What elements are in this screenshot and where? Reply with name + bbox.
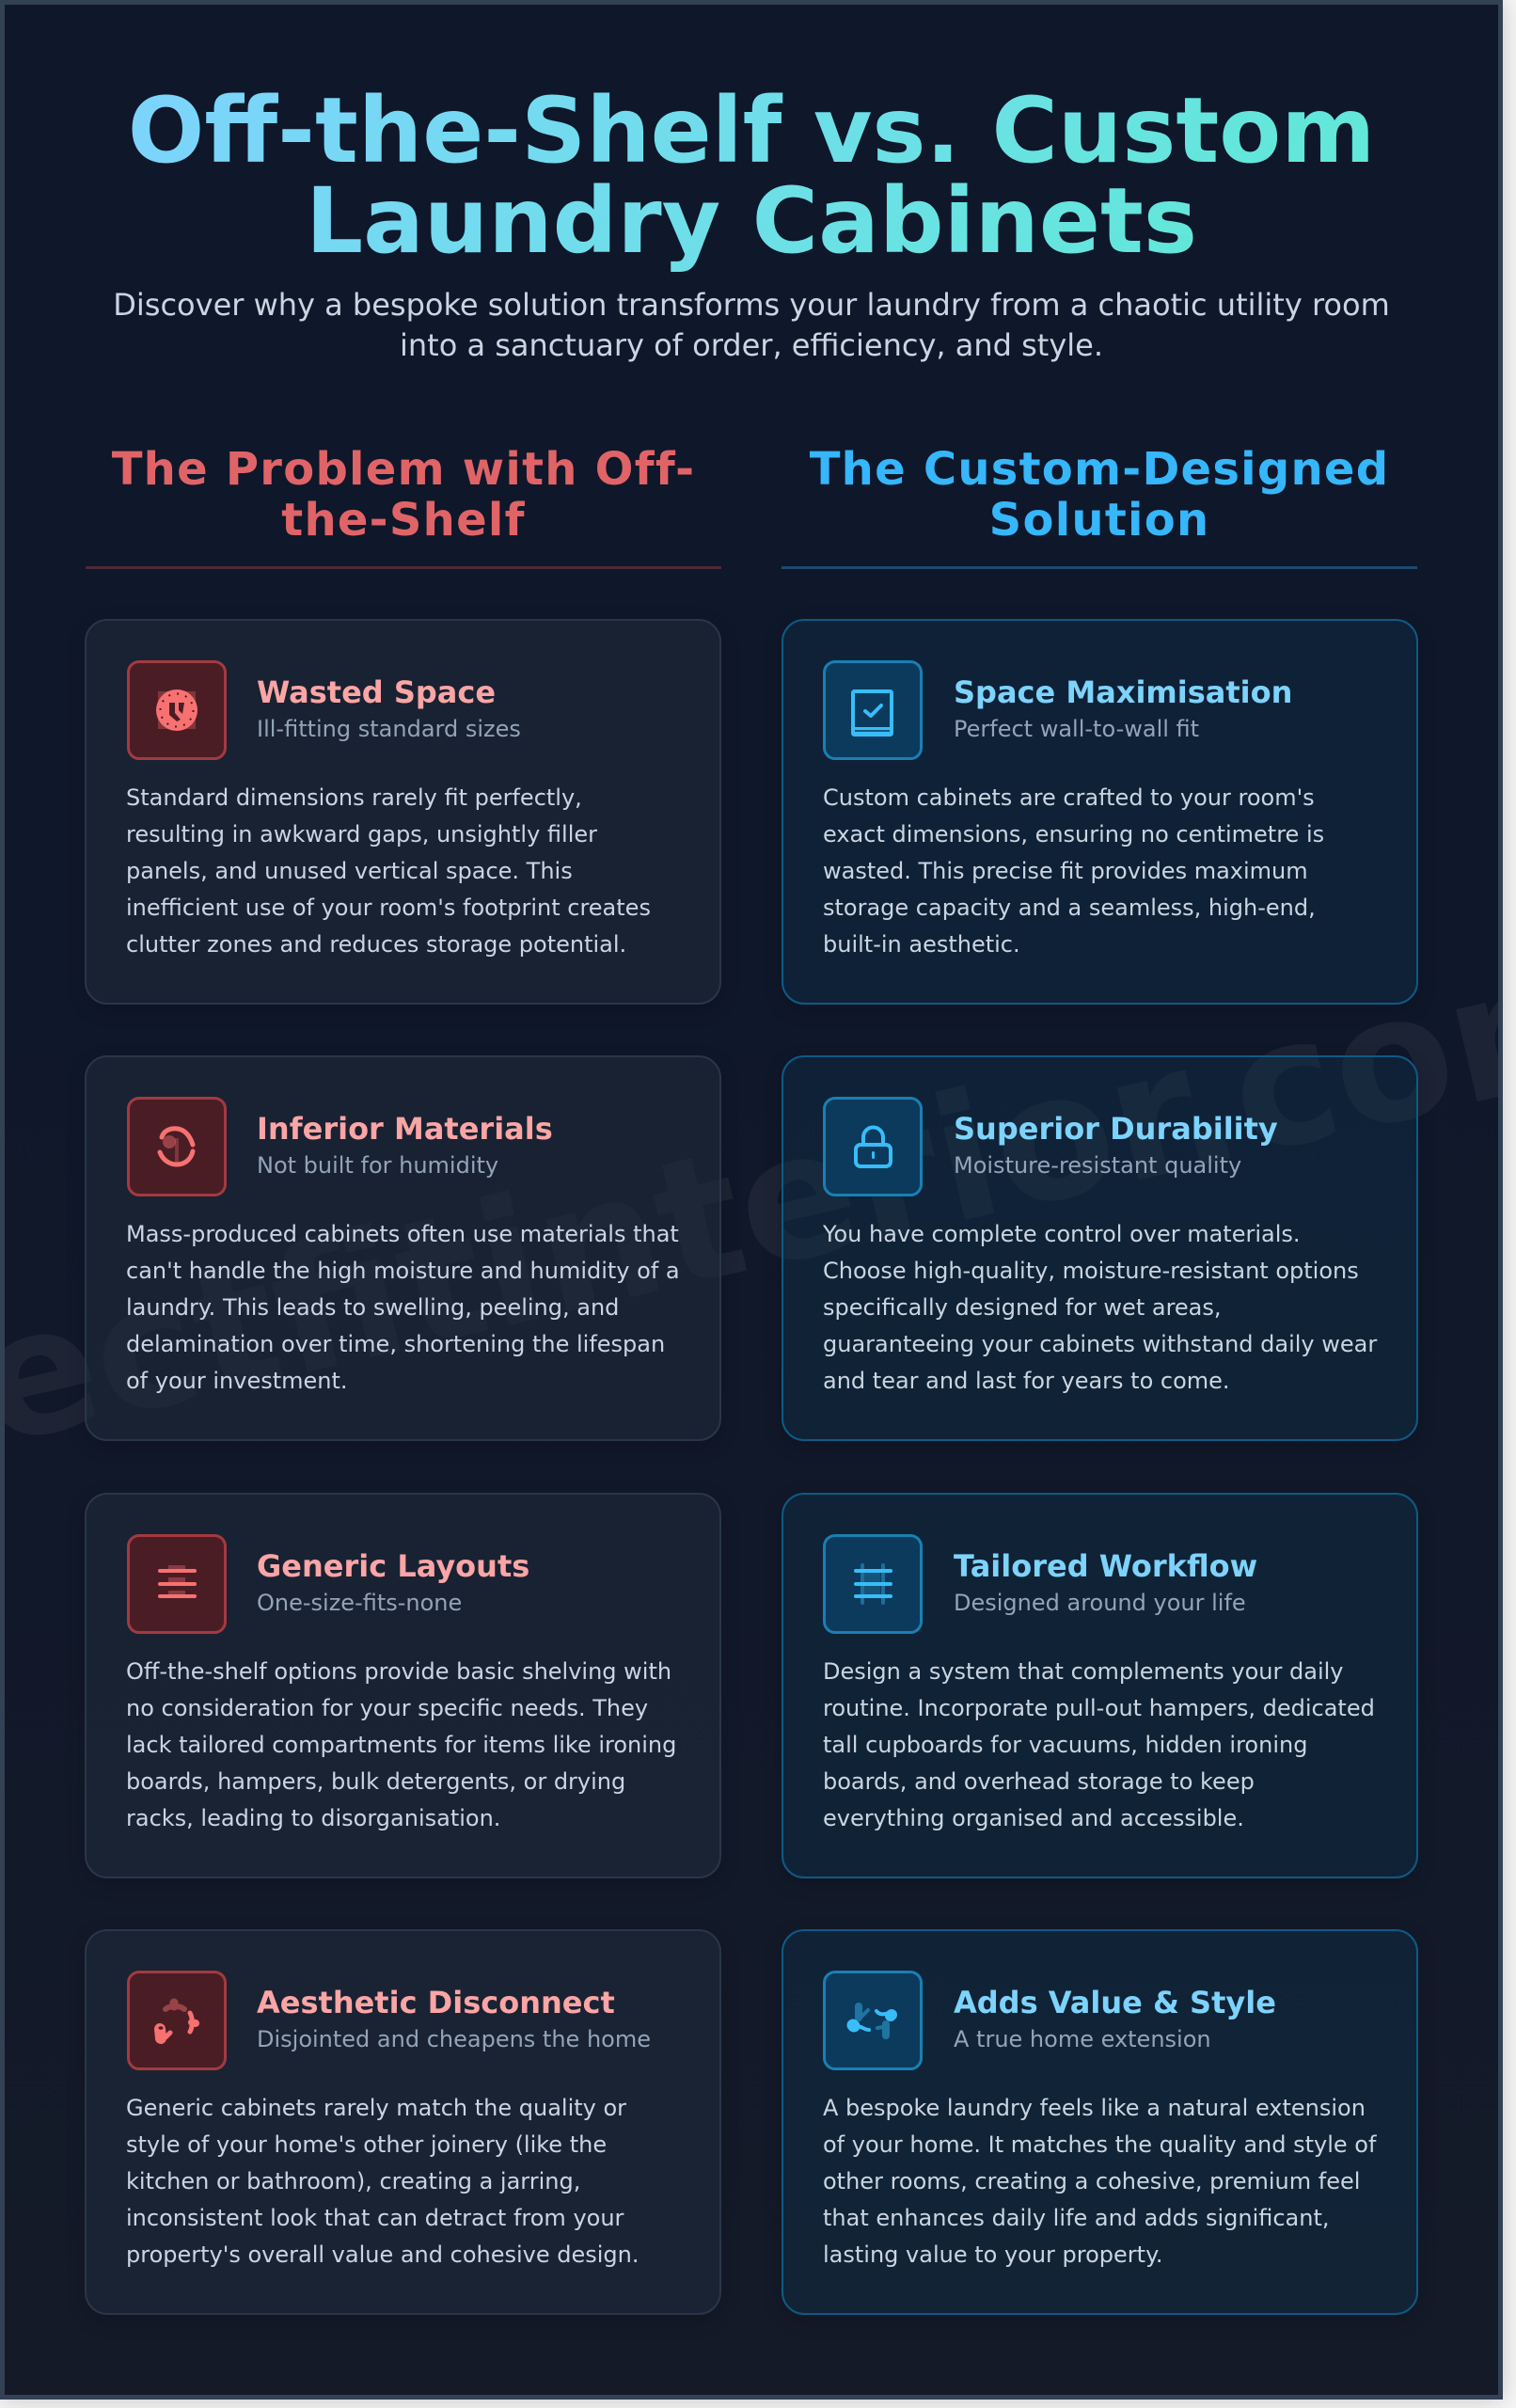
card body: Design a system that complements your daily xyxy=(823,1657,1343,1684)
card body xyxy=(823,1221,1377,1394)
icon: generic layouts xyxy=(127,1534,227,1634)
card body xyxy=(126,1657,676,1830)
title xyxy=(94,86,1409,289)
card body xyxy=(126,2094,640,2267)
card title: Adds Value & Style xyxy=(954,1985,1276,2020)
card body xyxy=(823,2094,1377,2267)
card subtitle: Moisture-resistant quality xyxy=(954,1152,1241,1179)
card subtitle: A true home extension xyxy=(954,2026,1211,2052)
card body: laundry. This leads to swelling, peeling, and xyxy=(126,1294,619,1321)
card body: tall cupboards for vacuums, hidden ironing xyxy=(823,1731,1307,1757)
title: Laundry Cabinets xyxy=(306,168,1197,274)
heading: solution column: Solution xyxy=(989,493,1209,546)
panel: aesthetic disconnect xyxy=(85,1929,721,2315)
panel: generic layouts xyxy=(85,1493,721,1878)
card body: other rooms, creating a cohesive, premium feel xyxy=(823,2167,1360,2194)
panel: inferior materials xyxy=(85,1055,721,1441)
card title: Superior Durability xyxy=(954,1111,1278,1147)
card body: no consideration for your specific needs. They xyxy=(126,1695,648,1721)
card body: wasted. This precise fit provides maximum xyxy=(823,858,1308,884)
card body: everything organised and accessible. xyxy=(823,1804,1244,1830)
card body: Choose high-quality, moisture-resistant options xyxy=(823,1257,1359,1283)
card body: resulting in awkward gaps, unsightly filler xyxy=(126,820,597,847)
card body: Custom cabinets are crafted to your room's xyxy=(823,784,1315,811)
panel: tailored workflow xyxy=(782,1493,1418,1878)
card body: and tear and last for years to come. xyxy=(823,1368,1230,1394)
card body: Standard dimensions rarely fit perfectly, xyxy=(126,784,582,811)
icon: space maximisation xyxy=(823,660,923,760)
card body xyxy=(823,784,1324,958)
card subtitle: Ill-fitting standard sizes xyxy=(257,716,521,742)
panel: adds value and style xyxy=(782,1929,1418,2315)
icon: wasted space xyxy=(127,660,227,760)
card body: inconsistent look that can detract from your xyxy=(126,2205,624,2231)
card body: specifically designed for wet areas, xyxy=(823,1294,1222,1321)
card body: lasting value to your property. xyxy=(823,2241,1162,2267)
card body: clutter zones and reduces storage potential. xyxy=(126,931,626,958)
card body: Mass-produced cabinets often use materials that xyxy=(126,1221,679,1247)
card body: of your home. It matches the quality and style of xyxy=(823,2131,1376,2158)
icon: inferior materials xyxy=(127,1097,227,1196)
card subtitle: Disjointed and cheapens the home xyxy=(257,2026,651,2052)
card body: storage capacity and a seamless, high-end, xyxy=(823,894,1316,920)
title: Off-the-Shelf vs. Custom xyxy=(128,78,1375,183)
panel: space maximisation xyxy=(782,619,1418,1005)
panel: wasted space xyxy=(85,619,721,1005)
card title: Wasted Space xyxy=(257,674,496,710)
card title: Generic Layouts xyxy=(257,1548,529,1584)
card title: Inferior Materials xyxy=(257,1111,553,1147)
card body xyxy=(126,784,651,958)
card body: delamination over time, shortening the lifespan xyxy=(126,1330,665,1356)
card body: boards, and overhead storage to keep xyxy=(823,1768,1255,1795)
icon: lock xyxy=(823,1097,923,1196)
heading: problem column: the-Shelf xyxy=(281,493,526,546)
card subtitle: Not built for humidity xyxy=(257,1152,498,1179)
card body: routine. Incorporate pull-out hampers, dedicated xyxy=(823,1695,1375,1721)
card body: racks, leading to disorganisation. xyxy=(126,1804,500,1830)
card body xyxy=(823,1657,1375,1830)
card subtitle: Perfect wall-to-wall fit xyxy=(954,716,1199,742)
card body: kitchen or bathroom), creating a jarring, xyxy=(126,2167,580,2194)
card body: exact dimensions, ensuring no centimetre is xyxy=(823,820,1324,847)
card body: built-in aesthetic. xyxy=(823,931,1020,958)
icon: tailored workflow xyxy=(823,1534,923,1634)
icon: aesthetic disconnect xyxy=(127,1971,227,2070)
card title: Tailored Workflow xyxy=(954,1548,1257,1584)
card body: property's overall value and cohesive design. xyxy=(126,2241,640,2267)
card body: panels, and unused vertical space. This xyxy=(126,858,573,884)
heading: solution column: The Custom-Designed xyxy=(810,442,1389,495)
icon: adds value and style xyxy=(823,1971,923,2070)
card body: Generic cabinets rarely match the quality or xyxy=(126,2094,626,2120)
card title: Space Maximisation xyxy=(954,674,1292,710)
card body: guaranteeing your cabinets withstand daily wear xyxy=(823,1330,1377,1356)
card body: boards, hampers, bulk detergents, or drying xyxy=(126,1768,625,1795)
card body xyxy=(126,1221,680,1394)
subtitle: into a sanctuary of order, efficiency, and style. xyxy=(400,327,1103,363)
panel: superior durability xyxy=(782,1055,1418,1441)
card body: can't handle the high moisture and humidity of a xyxy=(126,1257,680,1283)
heading: problem column: The Problem with Off- xyxy=(112,442,695,495)
subtitle: Discover why a bespoke solution transforms your laundry from a chaotic utility room xyxy=(113,287,1390,323)
heading: solution column xyxy=(810,442,1389,546)
card body: that enhances daily life and adds significant, xyxy=(823,2205,1330,2231)
card subtitle: Designed around your life xyxy=(954,1590,1246,1616)
card body: You have complete control over materials. xyxy=(823,1221,1301,1247)
heading: problem column xyxy=(112,442,695,546)
card body: A bespoke laundry feels like a natural extension xyxy=(823,2094,1366,2120)
card body: lack tailored compartments for items like ironing xyxy=(126,1731,676,1757)
card subtitle: One-size-fits-none xyxy=(257,1590,462,1616)
card title: Aesthetic Disconnect xyxy=(257,1985,615,2020)
subtitle xyxy=(113,287,1390,363)
card body: inefficient use of your room's footprint creates xyxy=(126,894,651,920)
card body: Off-the-shelf options provide basic shelving with xyxy=(126,1657,671,1684)
card body: of your investment. xyxy=(126,1368,348,1394)
card body: style of your home's other joinery (like the xyxy=(126,2131,607,2158)
